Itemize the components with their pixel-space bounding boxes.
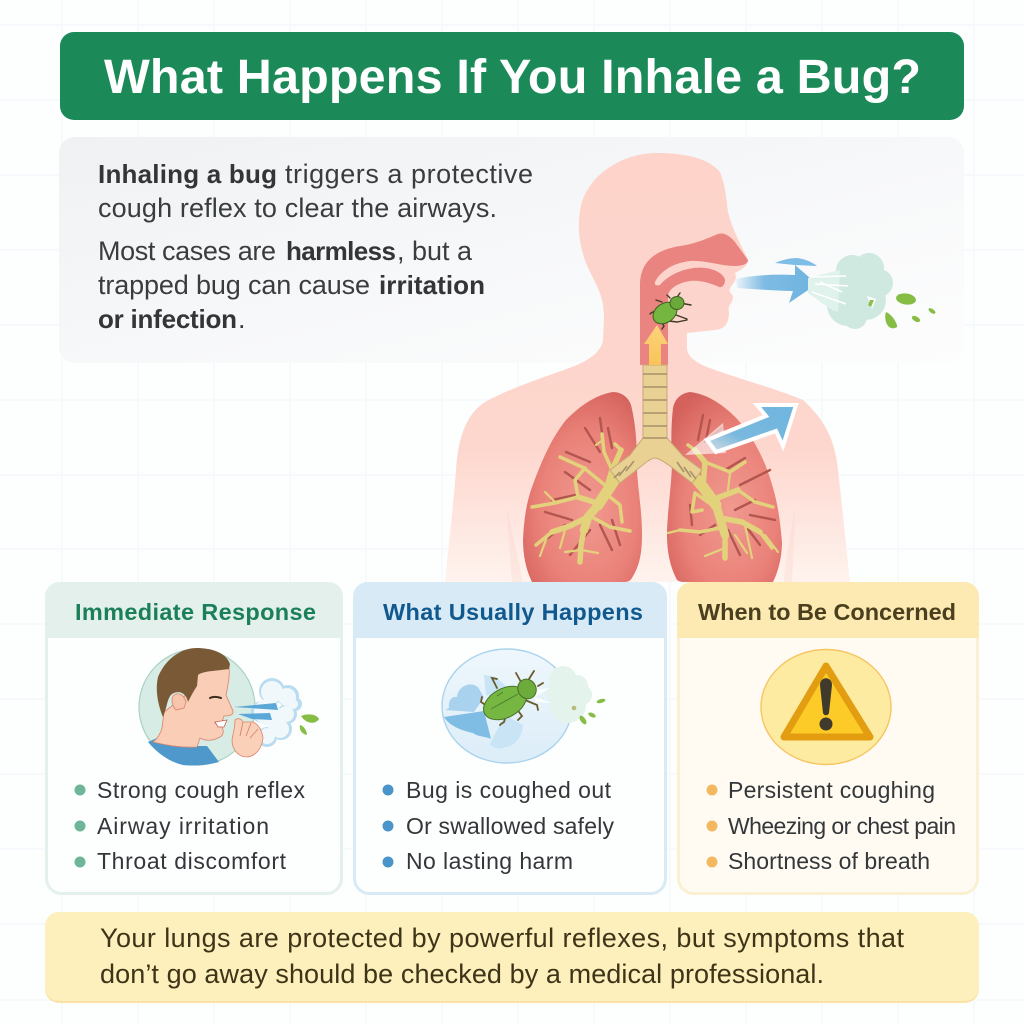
icon: warning triangle — [761, 650, 891, 764]
arm creases — [507, 505, 795, 582]
panel: when to be concerned — [677, 582, 979, 894]
hand — [232, 719, 263, 757]
list: immediate response: Strong cough reflex — [97, 777, 306, 803]
panel: what usually happens — [353, 582, 667, 894]
list: what usually happens: Bug is coughed out — [406, 777, 612, 803]
panel: intro — [59, 137, 964, 363]
heading: immediate response: Immediate Response — [75, 599, 316, 625]
intro text block: harmless — [286, 236, 396, 266]
anatomy illustration — [445, 153, 936, 582]
intro text block — [98, 159, 533, 334]
callout: footer note: Your lungs are protected by powerful reflexes, but symptoms that — [100, 923, 904, 953]
list: what usually happens: No lasting harm — [406, 848, 573, 874]
list: what usually happens — [382, 777, 614, 874]
right lung — [667, 392, 782, 582]
heading: what usually happens: What Usually Happens — [383, 599, 643, 625]
list: what usually happens: Or swallowed safely — [406, 813, 614, 839]
cough puff — [251, 678, 302, 747]
heading: when to be concerned: When to Be Concerned — [698, 599, 956, 625]
intro text block: Inhaling a bug — [98, 159, 277, 189]
intro text block: . — [238, 304, 246, 334]
list: immediate response: Airway irritation — [97, 813, 269, 839]
list: when to be concerned: Persistent coughing — [728, 777, 935, 803]
callout: footer note — [45, 912, 979, 1003]
title banner: What Happens If You Inhale a Bug? — [104, 50, 921, 104]
intro text block: cough reflex to clear the airways. — [98, 193, 497, 223]
body silhouette — [445, 153, 850, 582]
intro text block: , but a — [397, 236, 473, 266]
bronchial tree shadows — [545, 415, 775, 555]
bronchial tree right — [668, 445, 778, 558]
intro text block: Most cases are — [98, 236, 276, 266]
left lung — [523, 392, 642, 582]
cough cloud — [808, 253, 893, 329]
panel: immediate response — [45, 582, 343, 894]
yellow up arrow — [644, 325, 668, 365]
upper blue arrow: cough air — [736, 258, 817, 303]
leaf droplets — [885, 292, 936, 328]
callout: footer note: don’t go away should be checked by a medical professional. — [100, 959, 824, 989]
intro text block: triggers a protective — [285, 159, 533, 189]
airway — [640, 233, 748, 365]
intro text block: or infection — [98, 304, 237, 334]
title banner — [60, 32, 964, 120]
icon: man coughing — [139, 648, 319, 766]
icon: bug coughed out — [442, 649, 606, 763]
list: when to be concerned — [706, 777, 956, 874]
list: when to be concerned: Wheezing or chest pain — [728, 813, 956, 839]
list: immediate response — [74, 777, 306, 874]
list: when to be concerned: Shortness of breath — [728, 848, 930, 874]
bug in throat — [649, 293, 691, 329]
intro text block: trapped bug can cause — [98, 270, 370, 300]
lower blue arrow: air out of lung — [685, 405, 796, 455]
list: immediate response: Throat discomfort — [97, 848, 287, 874]
trachea — [610, 365, 702, 483]
bronchial tree left — [532, 434, 630, 562]
intro text block: irritation — [379, 270, 485, 300]
